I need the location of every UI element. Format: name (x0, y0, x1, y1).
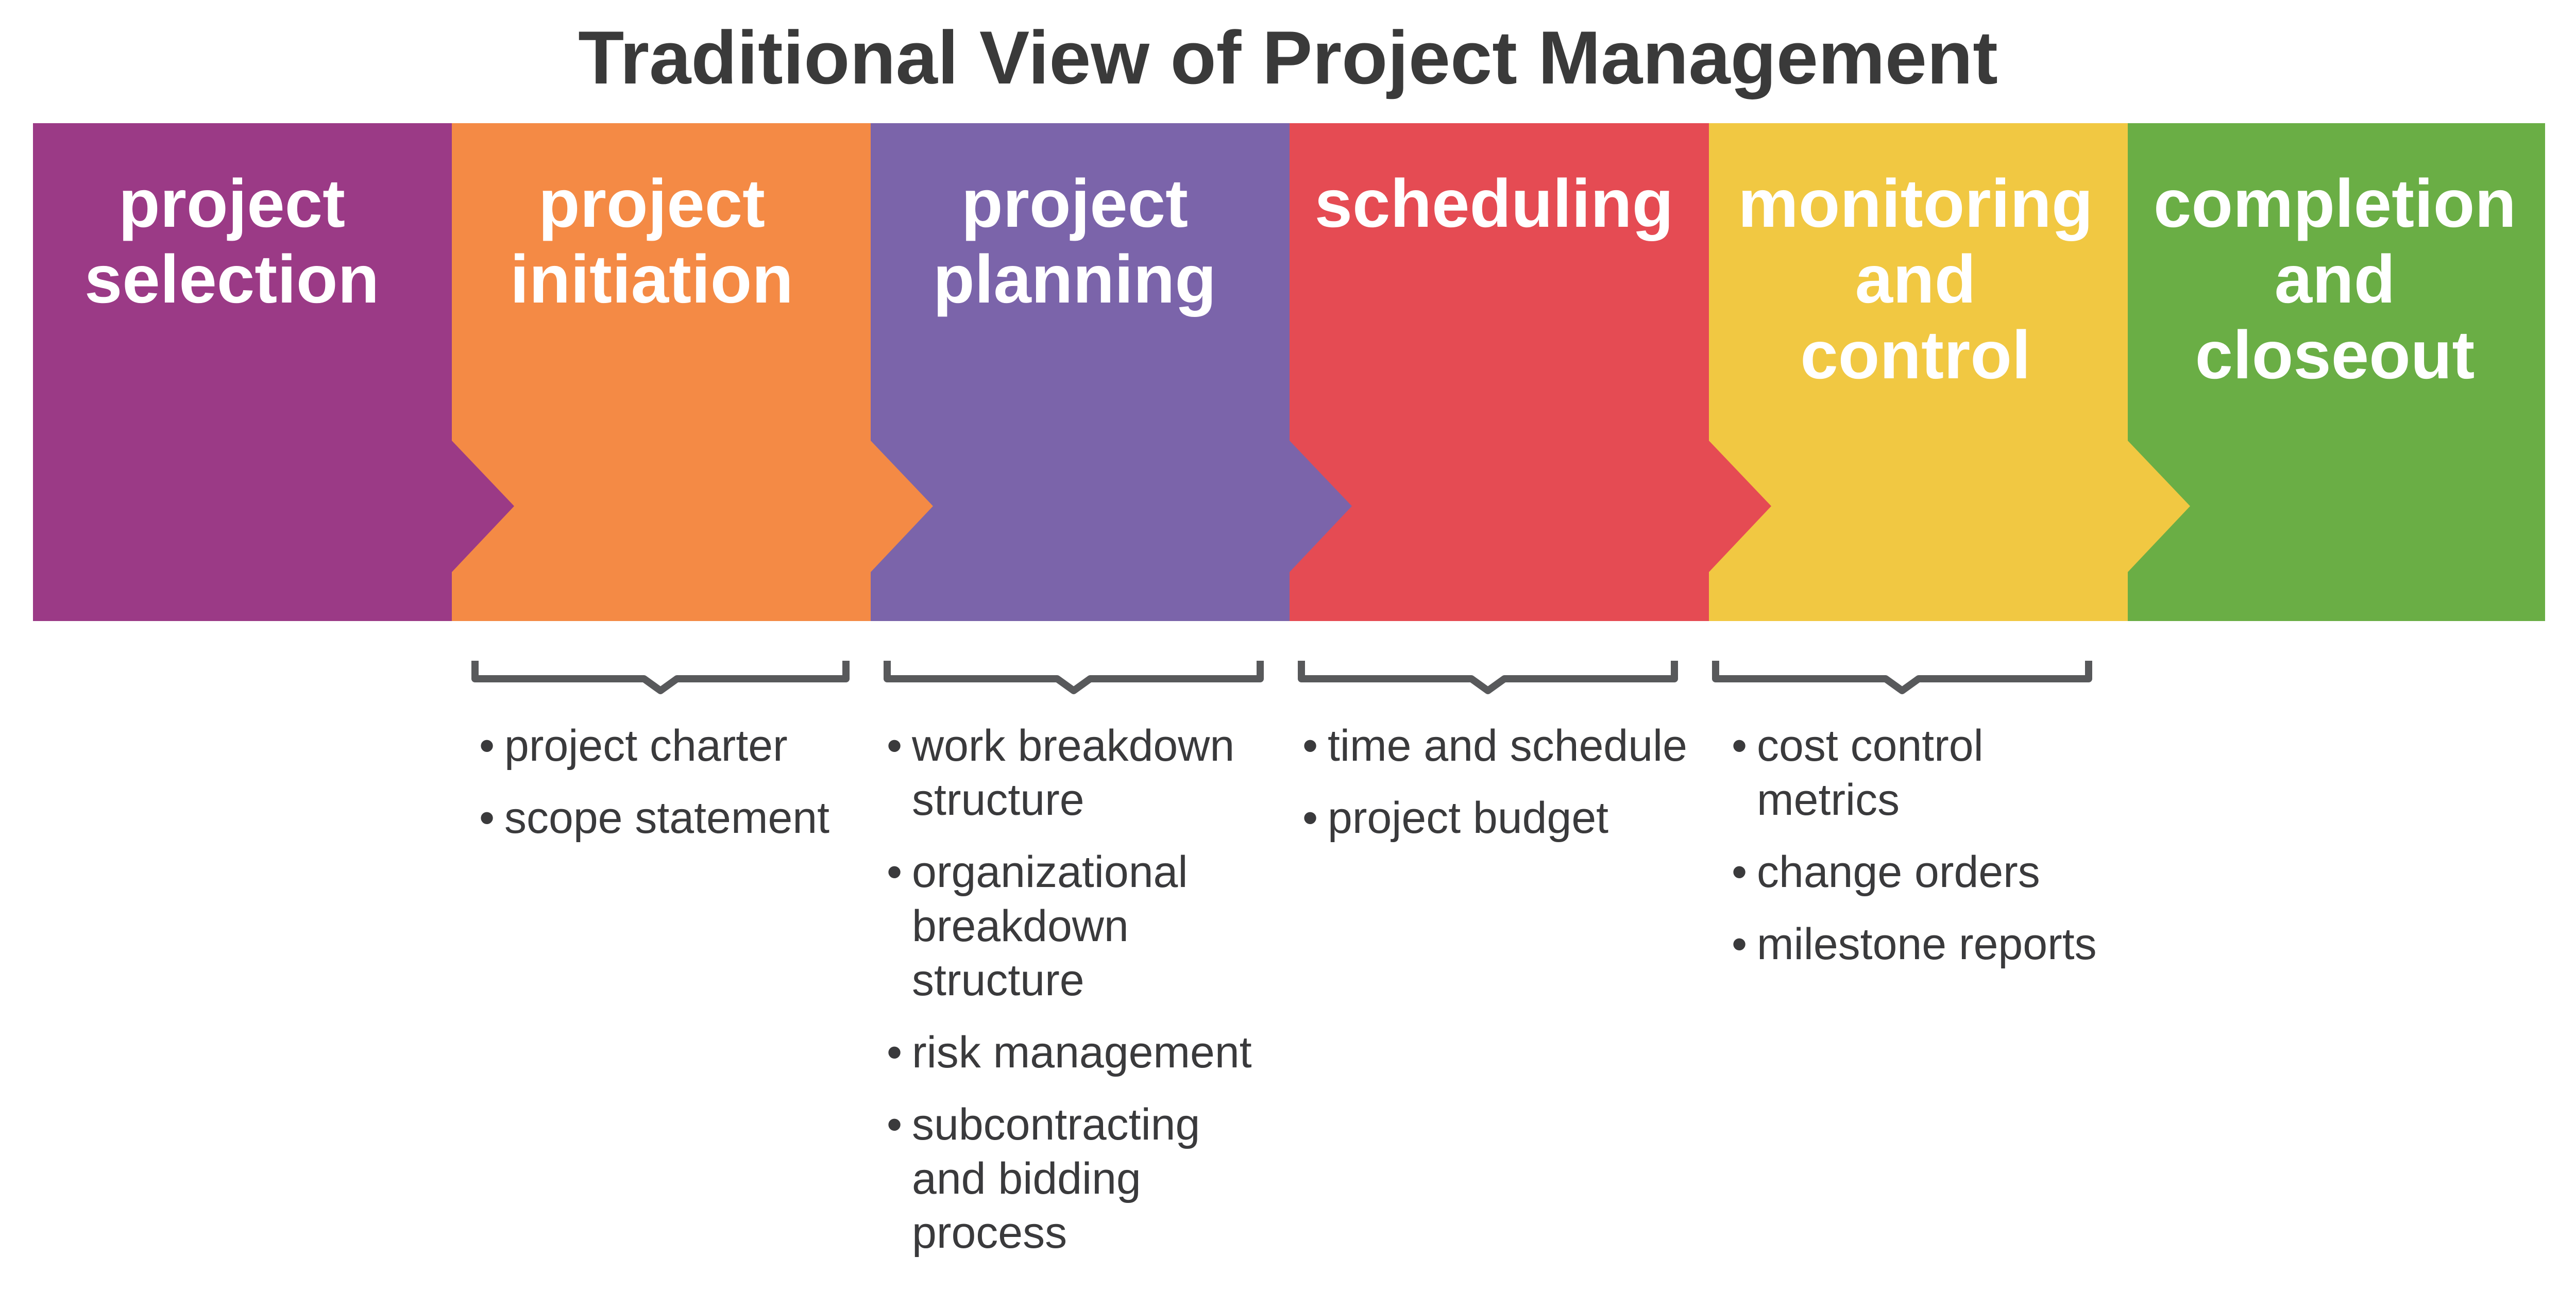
list: planning: • (887, 1100, 902, 1149)
list: monitoring: • (1732, 721, 1747, 771)
bracket: planning (887, 661, 1260, 691)
list: monitoring: milestone reports (1757, 919, 2097, 969)
list: planning: and bidding (912, 1154, 1141, 1203)
list: monitoring (1732, 721, 2097, 969)
bracket: monitoring (1716, 661, 2089, 691)
panel: project selection: project (118, 165, 345, 241)
list: planning: process (912, 1208, 1067, 1258)
list: scheduling: • (1302, 793, 1318, 843)
list: monitoring: • (1732, 919, 1747, 969)
list: scheduling: project budget (1328, 793, 1608, 843)
list: planning: work breakdown (911, 721, 1234, 771)
list: initiation (479, 721, 829, 843)
panel: project planning (871, 123, 1290, 621)
panel: completion and closeout (2128, 123, 2545, 621)
list: planning: organizational (912, 847, 1188, 897)
panel: completion and closeout: closeout (2195, 317, 2475, 393)
list: planning (887, 721, 1252, 1258)
list: initiation: scope statement (504, 793, 829, 843)
list: scheduling (1302, 721, 1687, 843)
panel: project selection (33, 123, 452, 621)
panel: project planning: planning (933, 241, 1216, 317)
list: monitoring: change orders (1757, 847, 2040, 897)
list: planning: structure (912, 775, 1084, 825)
title: Traditional View of Project Management (578, 15, 1998, 99)
list: planning: • (887, 847, 902, 897)
panel: project initiation: project (538, 165, 765, 241)
panel: scheduling: scheduling (1315, 165, 1673, 241)
list: planning: • (887, 721, 902, 771)
list: monitoring: metrics (1757, 775, 1900, 825)
process bar (33, 123, 2545, 621)
panel: monitoring and control: monitoring (1738, 165, 2093, 241)
list: planning: breakdown (912, 901, 1129, 951)
panel: project planning: project (961, 165, 1188, 241)
list: planning: subcontracting (912, 1100, 1200, 1149)
list: initiation: project charter (504, 721, 788, 771)
list: planning: risk management (912, 1028, 1252, 1077)
panel: monitoring and control: control (1800, 317, 2031, 393)
bracket: initiation (475, 661, 846, 691)
bracket: scheduling (1301, 661, 1674, 691)
list: planning: structure (912, 956, 1084, 1005)
list: planning: • (887, 1028, 902, 1077)
panel: project selection: selection (84, 241, 379, 317)
panel: monitoring and control (1709, 123, 2128, 621)
panel: scheduling (1290, 123, 1709, 621)
panel: project initiation: initiation (510, 241, 793, 317)
panel: project initiation (452, 123, 871, 621)
list: initiation: • (479, 721, 495, 771)
list: monitoring: cost control (1757, 721, 1984, 771)
list: scheduling: • (1302, 721, 1318, 771)
list: initiation: • (479, 793, 495, 843)
panel: completion and closeout: completion (2154, 165, 2516, 241)
list: monitoring: • (1732, 847, 1747, 897)
list: scheduling: time and schedule (1328, 721, 1687, 771)
panel: monitoring and control: and (1855, 241, 1976, 317)
panel: completion and closeout: and (2275, 241, 2395, 317)
